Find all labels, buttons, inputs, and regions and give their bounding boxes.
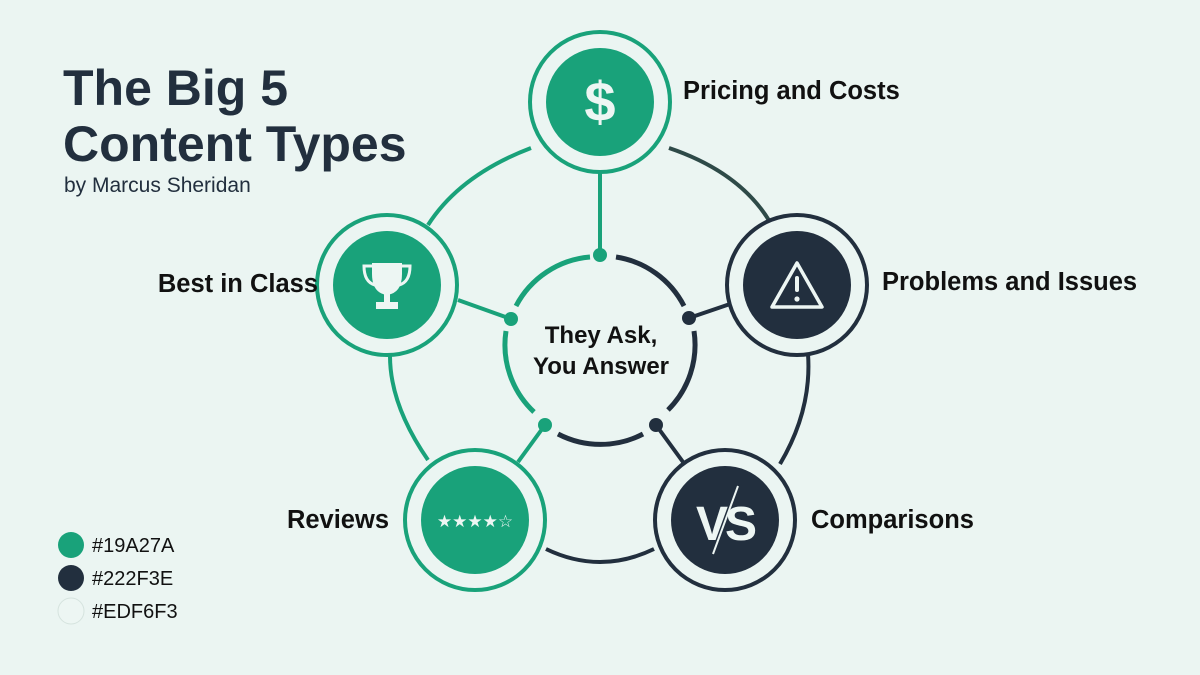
spokes (458, 173, 733, 462)
label: problems: Problems and Issues (882, 268, 1137, 296)
center text: They Ask, (545, 322, 657, 349)
label: best in class: Best in Class (158, 270, 318, 298)
title: The Big 5 (63, 60, 288, 116)
node: reviews (405, 450, 545, 590)
subtitle: by Marcus Sheridan (64, 174, 251, 197)
label: pricing: Pricing and Costs (683, 77, 900, 105)
spoke dots (504, 248, 696, 432)
node: pricing (530, 32, 670, 172)
node: comparisons (655, 450, 795, 590)
label: reviews: Reviews (287, 506, 389, 534)
node: problems (727, 215, 867, 355)
center text (533, 322, 669, 380)
icon: dollar: $ (584, 70, 616, 133)
legend: #222F3E (92, 568, 173, 590)
title (63, 60, 407, 172)
title: Content Types (63, 116, 407, 172)
legend (58, 532, 178, 624)
center text: You Answer (533, 353, 669, 380)
legend: #EDF6F3 (92, 601, 178, 623)
icon: trophy (364, 263, 410, 309)
icon: warning (772, 263, 822, 307)
node: best in class (317, 215, 457, 355)
outer ring arcs (390, 148, 808, 562)
legend: #19A27A (92, 535, 175, 557)
icon: stars: ★★★★☆ (437, 512, 513, 532)
label: comparisons: Comparisons (811, 506, 974, 534)
icon: vs: VS (696, 498, 756, 551)
center ring (505, 257, 695, 444)
